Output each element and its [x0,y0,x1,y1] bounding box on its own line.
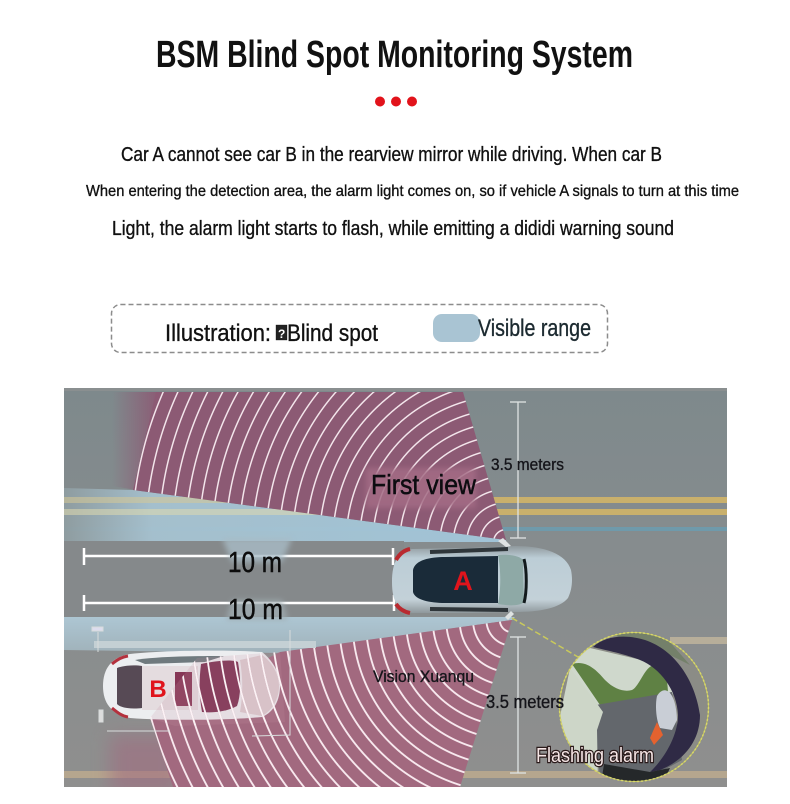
blind spot zone: upper [133,392,506,540]
distance line 1 [84,548,393,565]
lane lines showing through visible range [64,497,318,515]
description text block [86,144,739,240]
darker road band behind distance lines [64,541,404,542]
blurred pink wash at bottom left [110,735,180,795]
visible range: lower [64,617,515,653]
road surface [64,388,727,787]
label: vision xuanqu: Vision Xuanqu [373,667,474,686]
blind spot arcs over car B [150,652,285,726]
label: 10 m top: 10 m [228,547,282,579]
description text block: Car A cannot see car B in the rearview mirror while driving. When car B [121,144,662,166]
blind spot zone: lower [150,620,512,787]
blurred patch behind first view label [366,468,476,508]
label: 10 m bottom: 10 m [228,594,283,626]
legend label: blind spot: ? [278,327,285,341]
legend label: blind spot [165,320,378,347]
red dots divider [375,96,417,106]
legend panel [112,304,608,352]
description text block: Light, the alarm light starts to flash, while emitting a dididi warning sound [112,218,674,240]
mirror inset [558,631,712,790]
legend label: blind spot: Blind spot [287,320,378,347]
distance line 2 [84,595,394,611]
dimension: lower 3.5 m [510,637,526,773]
dimension: upper 3.5 m [510,402,526,538]
legend swatch: visible range [433,314,480,342]
title: BSM Blind Spot Monitoring System [156,34,633,76]
blind spot zone: rear left fade [120,392,156,490]
car A [392,538,572,620]
car B [103,651,285,726]
label: lower 3.5 meters: 3.5 meters [486,692,564,712]
label patches behind distance text [222,538,292,620]
HUD outline around car B [92,627,316,736]
callout line to mirror [512,618,578,657]
lane markings [64,497,727,778]
label: upper 3.5 meters: 3.5 meters [491,455,564,474]
label: flashing alarm: Flashing alarm [536,745,654,767]
legend label: blind spot: Illustration: [165,320,271,347]
label: first view: First view [371,469,477,500]
description text block: When entering the detection area, the alarm light comes on, so if vehicle A signals to turn at this time [86,183,739,200]
visible range: upper [64,488,506,542]
letter B: B [149,676,167,703]
letter A: A [453,566,473,596]
road scene illustration [64,388,727,795]
infographic canvas [64,40,739,787]
legend label: visible range: Visible range [478,315,591,342]
